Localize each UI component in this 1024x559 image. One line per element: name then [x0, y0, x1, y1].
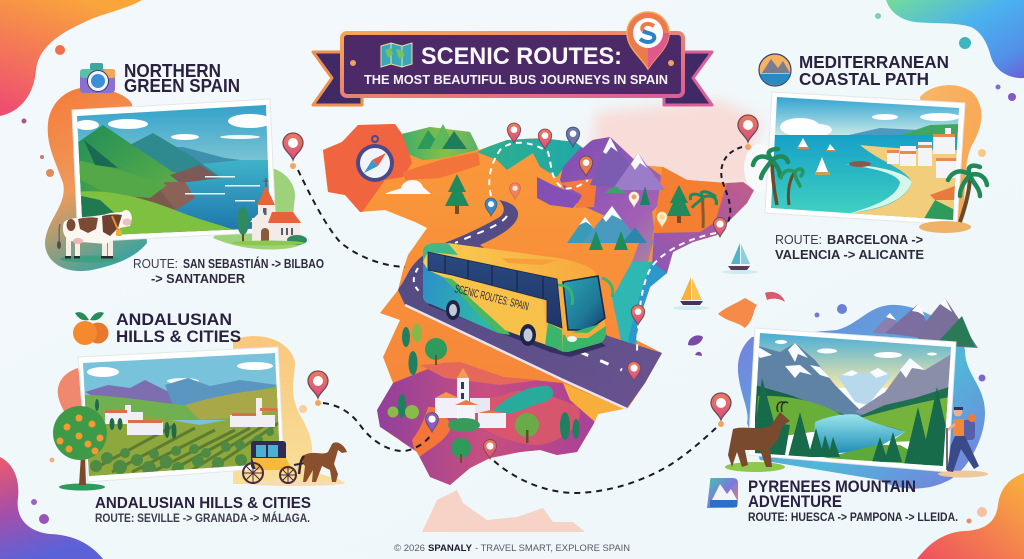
green mountains	[417, 124, 467, 149]
palm tree and sand: right	[919, 166, 987, 233]
heading block: northern green Spain: GREEN SPAIN	[124, 76, 240, 96]
white dashed route: north	[489, 143, 588, 196]
pin: andalusia connector	[308, 371, 328, 406]
blob: bottom right corner	[917, 473, 1024, 559]
icon: cloud	[385, 180, 431, 194]
ribbon tail left	[313, 52, 362, 105]
postcard frame	[765, 92, 965, 225]
route text: Mediterranean	[775, 232, 924, 262]
icon: mountains and sea badge	[759, 54, 791, 86]
islands	[718, 298, 757, 328]
map pins	[426, 123, 726, 459]
heading block: Mediterranean: COASTAL PATH	[799, 69, 929, 89]
route text: northern: SAN SEBASTIÁN -> BILBAO	[183, 256, 324, 271]
beach scene	[770, 95, 965, 225]
dashed connector: northern to map	[298, 170, 405, 267]
subtitle text: THE MOST BEAUTIFUL BUS JOURNEYS IN SPAIN	[364, 73, 668, 87]
white halo behind palms	[744, 144, 776, 192]
route text: Mediterranean: ROUTE:	[775, 232, 822, 247]
heading block: Andalusian hills: HILLS & CITIES	[116, 327, 241, 346]
church	[232, 178, 307, 246]
palm trees: left	[753, 149, 803, 205]
white dashed route: east coast	[637, 233, 716, 352]
dashed connector: pyrenees to map	[493, 428, 716, 493]
pale mountain silhouette below map	[422, 490, 585, 532]
dashed connector: mediterranean to map	[721, 147, 742, 222]
bus destination text: SCENIC ROUTES: SPAIN	[453, 283, 530, 313]
pale pink backdrop behind north-east Spain	[590, 100, 762, 195]
heading block: Pyrenees: ROUTE: HUESCA -> PAMPONA -> LLEIDA.	[748, 512, 958, 524]
bus mirrors	[558, 278, 613, 305]
bus shadow	[428, 285, 606, 357]
chamois	[725, 402, 790, 472]
heading text: NORTHERN	[124, 61, 221, 81]
postcard frame	[72, 99, 276, 242]
palm: north-east	[690, 192, 716, 228]
title banner	[313, 12, 712, 105]
alpine lake scene	[755, 333, 951, 466]
blob: yellow backdrop	[233, 336, 343, 484]
map of Spain	[323, 122, 754, 485]
dashed connector: andalusia to map	[323, 403, 431, 451]
caption: Andalusian route: ROUTE: SEVILLE -> GRANADA -> MÁLAGA.	[95, 512, 310, 525]
heading block: Pyrenees: ADVENTURE	[748, 493, 842, 511]
blue snowy mountains	[567, 206, 647, 250]
heading block: Andalusian hills	[73, 310, 241, 346]
mountains above postcard	[872, 298, 978, 348]
bus front panel	[545, 323, 563, 352]
panel: Mediterranean coastal path	[744, 85, 987, 233]
blob: orange backdrop	[920, 85, 981, 228]
blob: pink backdrop	[58, 368, 90, 425]
bus headlight	[567, 336, 577, 342]
title text: SCENIC ROUTES:	[421, 43, 622, 70]
white village	[435, 368, 506, 432]
banner body	[342, 33, 683, 96]
caption: Andalusian route	[95, 495, 311, 525]
icon: mountain tile	[707, 478, 738, 508]
bus body	[423, 243, 606, 352]
bus wheels	[446, 300, 536, 346]
blob: bottom left corner	[0, 457, 103, 559]
trees: south coast	[388, 394, 580, 463]
heading block: Pyrenees	[707, 478, 958, 524]
icon: oranges	[73, 312, 108, 345]
caption: Andalusian route: ANDALUSIAN HILLS & CITIES	[95, 495, 311, 512]
heading text: ANDALUSIAN	[116, 310, 232, 329]
footer credit: SPANALY	[428, 543, 473, 554]
bus green swoosh	[443, 277, 510, 335]
icon: folded map	[381, 43, 412, 67]
panel: Pyrenees mountain adventure	[725, 298, 988, 489]
bus side windows	[428, 252, 562, 328]
pin: pyrenees connector	[711, 393, 731, 427]
banner rivets	[350, 60, 674, 66]
route text: Mediterranean: VALENCIA -> ALICANTE	[775, 247, 924, 262]
boats and islands	[673, 243, 785, 356]
orange tree	[53, 406, 107, 490]
road	[398, 200, 662, 409]
icon: camera	[80, 63, 115, 93]
rolling hills scene	[83, 353, 279, 476]
tree	[445, 174, 469, 214]
tree: north-east	[667, 185, 691, 223]
ribbon tail right	[664, 52, 712, 105]
blob: top left corner	[0, 0, 142, 116]
sailboats	[797, 138, 836, 175]
panel: Andalusian hills and cities	[53, 336, 347, 490]
purple snowy mountains	[590, 137, 665, 205]
route text: northern	[133, 256, 324, 286]
bus roof teal stripe	[423, 243, 458, 262]
route text: Mediterranean: BARCELONA ->	[827, 232, 923, 247]
pin: northern connector	[283, 133, 303, 169]
pin: mediterranean connector	[738, 115, 758, 150]
footer credit: © 2026	[394, 543, 425, 554]
logo pin	[627, 12, 669, 69]
bus	[423, 243, 613, 357]
postcard frame	[78, 347, 284, 482]
hiker	[938, 407, 988, 478]
blob: orange-teal backdrop	[45, 88, 147, 271]
bus lower livery left	[423, 262, 498, 333]
heading block: northern green Spain	[80, 61, 240, 96]
cow	[57, 210, 132, 262]
map regions	[323, 124, 754, 485]
white dashed route: left bend	[414, 268, 420, 292]
route text: northern: ROUTE:	[133, 257, 178, 271]
heading block: Mediterranean	[759, 52, 949, 89]
bus yellow panel	[452, 277, 547, 345]
footer credit	[394, 543, 630, 554]
sailboat: orange	[673, 277, 709, 310]
bus windshield	[563, 276, 605, 330]
postcard frame	[748, 328, 956, 472]
trees: southern group	[402, 324, 447, 375]
heading text: MEDITERRANEAN	[799, 52, 949, 72]
panel: northern green Spain	[45, 88, 307, 271]
coastal scene	[77, 105, 269, 235]
blob: top right corner	[886, 0, 1024, 78]
footer credit: - TRAVEL SMART, EXPLORE SPAIN	[475, 543, 630, 554]
blob: green backdrop	[213, 168, 303, 250]
sailboat: blue	[722, 243, 758, 274]
bus air conditioning unit	[502, 258, 558, 265]
blob: purple-teal backdrop	[738, 305, 985, 489]
heading text: PYRENEES MOUNTAIN	[748, 478, 916, 496]
carriage and horse	[243, 441, 347, 486]
route text: northern: -> SANTANDER	[151, 272, 245, 286]
icon: compass	[356, 136, 394, 182]
